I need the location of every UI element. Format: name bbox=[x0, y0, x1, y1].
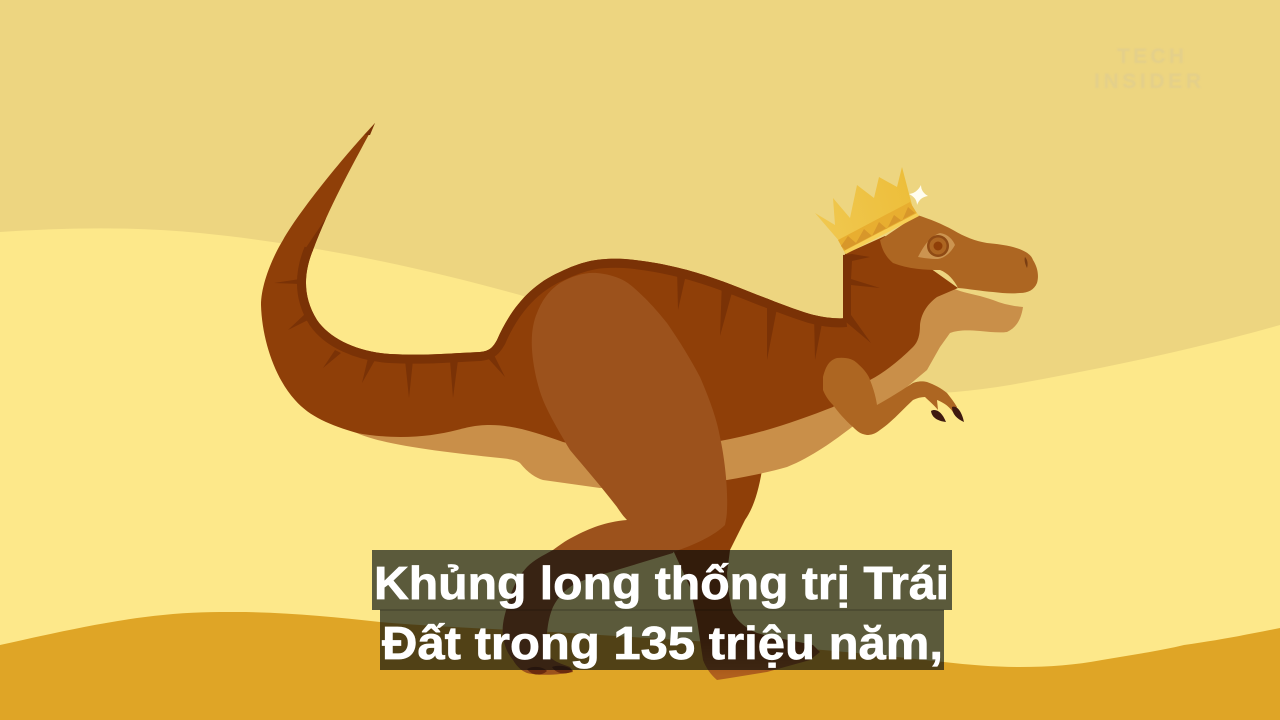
crown bbox=[815, 167, 919, 254]
caption bbox=[372, 550, 952, 670]
background: foreground ground bbox=[0, 612, 1280, 720]
toes bbox=[527, 666, 573, 675]
far leg bbox=[503, 500, 700, 675]
thigh bbox=[532, 273, 727, 552]
back stripe and spikes bbox=[274, 123, 880, 398]
caption text bbox=[374, 557, 949, 669]
caption text: Đất trong 135 triệu năm, bbox=[382, 617, 943, 669]
caption text: Khủng long thống trị Trái bbox=[374, 557, 949, 609]
watermark: Tech Insider logo: INSIDER bbox=[1094, 70, 1201, 93]
eye bbox=[918, 233, 955, 259]
watermark: Tech Insider logo bbox=[1094, 45, 1201, 93]
sparkle bbox=[909, 185, 928, 205]
near lower leg bbox=[673, 470, 820, 680]
watermark: Tech Insider logo: TECH bbox=[1117, 45, 1184, 68]
arm bbox=[823, 358, 964, 435]
claws bbox=[931, 407, 964, 422]
background: middle sand dune bbox=[0, 228, 1280, 720]
caption background bbox=[372, 550, 952, 670]
belly bbox=[357, 280, 1023, 488]
head top bbox=[880, 215, 1038, 293]
nostril bbox=[1025, 257, 1028, 268]
torso, tail and neck bbox=[261, 123, 958, 460]
dinosaur bbox=[261, 123, 1038, 680]
